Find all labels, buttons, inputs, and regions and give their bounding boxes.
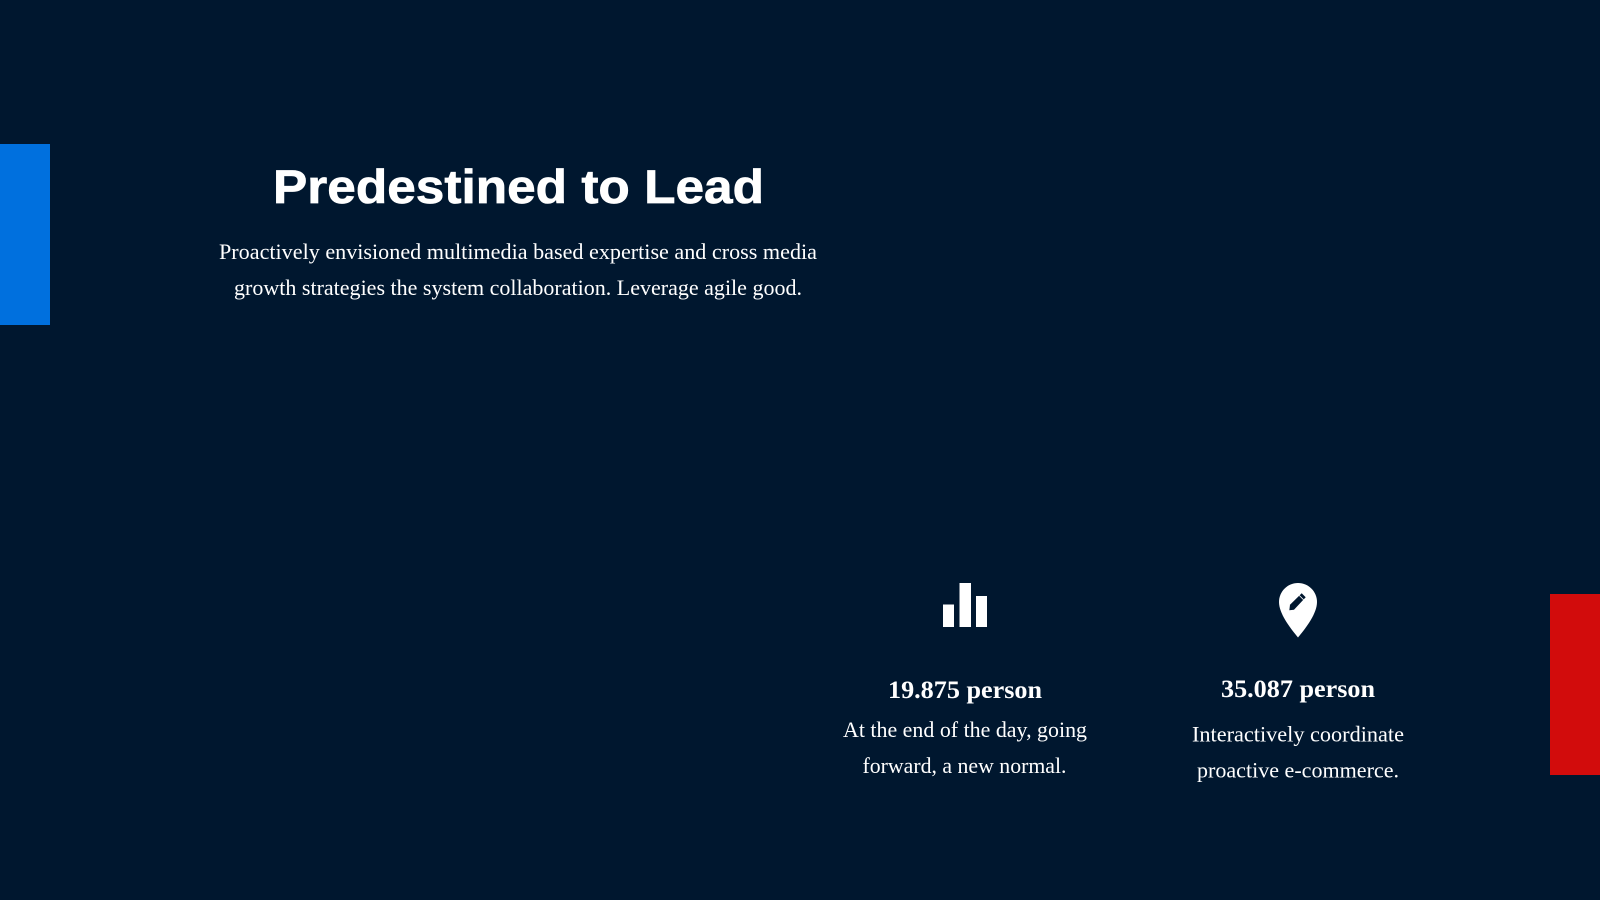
panel: stat 35.087 person <box>1192 583 1404 782</box>
icon: map pin with pencil <box>1279 583 1317 638</box>
title: Predestined to Lead <box>273 160 764 213</box>
icon: bar chart <box>943 583 987 627</box>
blue accent block <box>0 144 50 325</box>
red accent block <box>1550 594 1600 775</box>
stat description: Interactively coordinate <box>1192 722 1404 746</box>
stat description <box>843 717 1087 778</box>
intro text block: growth strategies the system collaboration. Leverage agile good. <box>234 275 802 300</box>
stat value: 19.875 person <box>888 677 1042 704</box>
stat value: 35.087 person <box>1221 676 1375 703</box>
stat description: proactive e-commerce. <box>1197 758 1399 782</box>
panel: stat 19.875 person <box>843 583 1087 778</box>
stat description: At the end of the day, going <box>843 717 1087 742</box>
intro text block: Proactively envisioned multimedia based expertise and cross media <box>219 239 817 264</box>
intro text block <box>219 239 817 300</box>
stat description <box>1192 722 1404 782</box>
stat description: forward, a new normal. <box>862 753 1066 778</box>
